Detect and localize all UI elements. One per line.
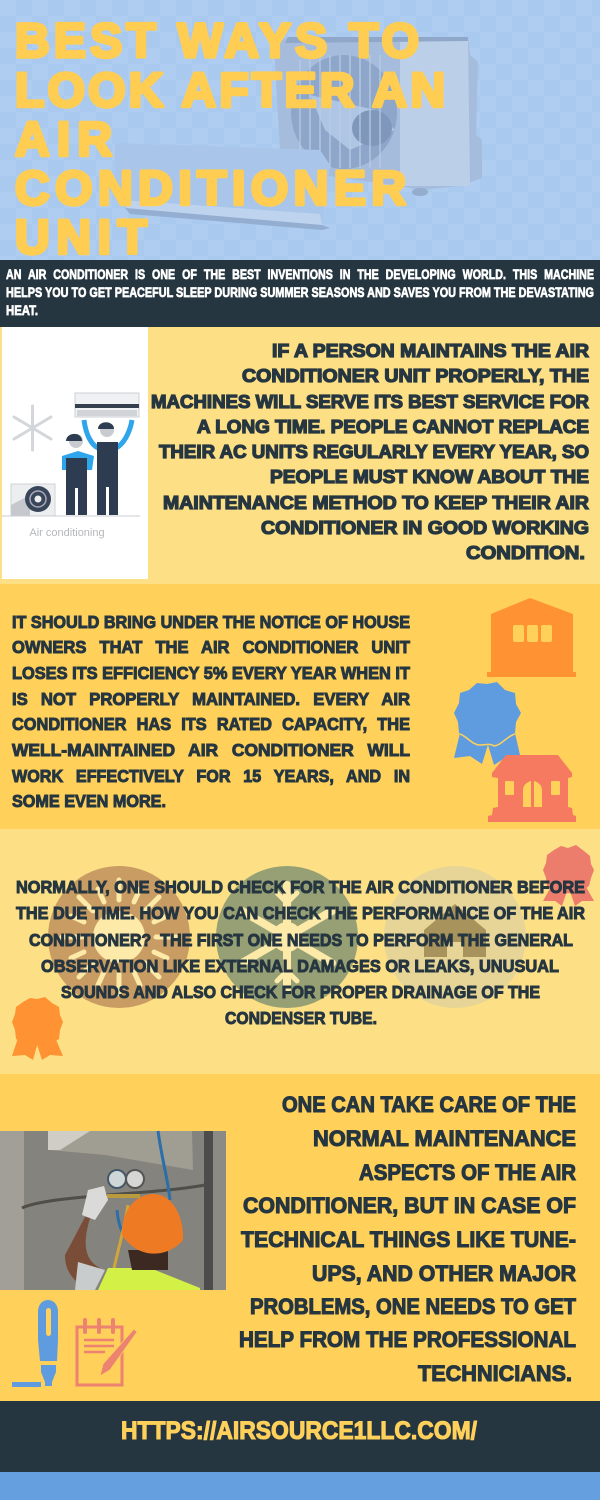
panel: introduction [0,260,600,327]
text block: professional technicians: TECHNICIANS. [418,1361,572,1386]
text block: efficiency: WELL-MAINTAINED AIR CONDITIONER WILL [12,740,410,760]
icon: blue tool [12,1300,58,1387]
panel: efficiency [0,584,600,829]
icon: orange building [487,598,576,677]
title [15,15,445,264]
title: CONDITIONER [15,162,406,216]
icon: blue ribbon [454,682,521,765]
text block: efficiency: SOME EVEN MORE. [12,791,166,811]
text block: professional technicians: CONDITIONER, BUT IN CASE OF [243,1193,576,1218]
text block: maintenance: IF A PERSON MAINTAINS THE AIR [272,340,589,361]
icon: red shop [488,755,576,822]
text block: maintenance: MACHINES WILL SERVE ITS BEST SERVICE FOR [151,391,589,412]
text block: maintenance: CONDITIONER IN GOOD WORKING [261,517,589,538]
title: LOOK AFTER AN [15,64,445,118]
icon: snowflake [14,406,51,450]
icon: snowflake circle [216,866,358,1008]
text block: professional technicians: NORMAL MAINTENANCE [313,1126,576,1151]
text block: maintenance [151,340,589,563]
illustration: technicians installing air conditioner [2,327,148,579]
text block: professional technicians: ASPECTS OF THE AIR [359,1160,576,1185]
icon: indoor AC [75,393,139,417]
text block: maintenance: CONDITION. [466,542,585,563]
text block: professional technicians [239,1092,576,1386]
panel: professional technicians [0,1074,600,1402]
figure: right technician [84,420,132,515]
text block: efficiency: LOSES ITS EFFICIENCY 5% EVERY YEAR WHEN IT [12,663,410,683]
text block: professional technicians: UPS, AND OTHER MAJOR [312,1261,576,1286]
icon: outdoor unit [11,484,55,516]
text block: maintenance: A LONG TIME. PEOPLE CANNOT REPLACE [197,416,589,437]
footer colour band [0,1472,600,1500]
illustration caption: Air conditioning [29,527,105,539]
text block: maintenance: MAINTENANCE METHOD TO KEEP THEIR AIR [163,492,589,513]
icon: red ribbon [543,845,594,906]
panel: proper maintenance [0,327,600,584]
text block: maintenance: THEIR AC UNITS REGULARLY EVERY YEAR, SO [159,441,589,462]
intro text: HEAT. [6,303,38,318]
text block: efficiency: CONDITIONER HAS ITS RATED CAPACITY, THE [12,714,410,734]
photo: technician checking AC gauges [0,1131,226,1290]
text block: check performance [16,877,585,1028]
text block: efficiency: IT SHOULD BRING UNDER THE NOTICE OF HOUSE [12,612,410,632]
text block: maintenance: CONDITIONER UNIT PROPERLY, THE [242,365,589,386]
figure: left technician [62,434,94,515]
title: UNIT [15,212,147,264]
text block: efficiency [12,612,410,811]
text block: professional technicians: TECHNICAL THINGS LIKE TUNE- [241,1227,576,1252]
text block: efficiency: WORK EFFECTIVELY FOR 15 YEARS, AND IN [12,766,410,786]
text block: efficiency: OWNERS THAT THE AIR CONDITIONER UNIT [12,637,410,657]
panel: check performance [0,829,600,1074]
panel: header [0,0,600,264]
panel: footer [0,1401,600,1472]
text block: check performance: OBSERVATION LIKE EXTERNAL DAMAGES OR LEAKS, UNUSUAL [41,956,559,976]
icon: notepad and pencil [77,1320,137,1385]
icon: house circle [384,866,526,1008]
intro text [6,267,594,318]
footer link text: HTTPS://AIRSOURCE1LLC.COM/ [121,1417,477,1445]
text block: check performance: SOUNDS AND ALSO CHECK FOR PROPER DRAINAGE OF THE [61,982,540,1002]
image: outdoor air conditioner unit [274,37,482,196]
icon: orange ribbon [12,997,63,1060]
icon: sun circle [48,866,190,1008]
image: indoor air conditioner unit [115,143,330,230]
text block: check performance: CONDENSER TUBE. [225,1008,377,1028]
text block: professional technicians: HELP FROM THE PROFESSIONAL [239,1327,576,1352]
text block: efficiency: IS NOT PROPERLY MAINTAINED. EVERY AIR [12,689,410,709]
title: AIR [15,114,112,166]
title: BEST WAYS TO [15,15,419,68]
text block: maintenance: PEOPLE MUST KNOW ABOUT THE [270,466,589,487]
